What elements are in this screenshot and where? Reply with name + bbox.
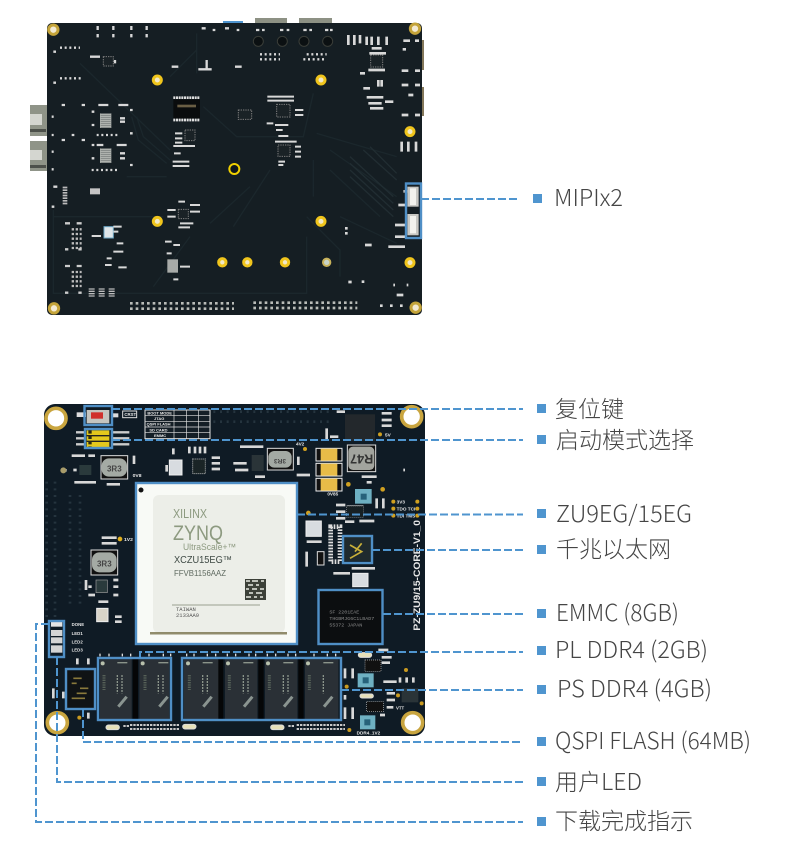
VGA-style pad grids [65,187,112,297]
highlight box: PS DDR4 [182,658,341,720]
bottom capacitors [106,653,373,730]
user LEDs: LED1 [72,631,83,636]
test point labels: 5V [385,433,392,438]
test point labels [296,432,419,518]
panel: top board photo [30,18,424,315]
right side connectors [421,40,424,116]
callout: ZU9EG/15EG: ZU9EG/15EG [556,495,692,529]
user LEDs [51,621,84,653]
misc parts lower right: DDR4_1V2 [357,731,381,736]
boot mode table: BOOT MODE [147,410,172,415]
QSPI flash chip [67,671,94,708]
callout: 复位键 [84,390,624,425]
callout: 下载完成指示: 下载完成指示 [555,802,693,836]
highlight box: PL DDR4 [98,658,171,720]
callout: ZU9EG/15EG [136,483,692,644]
inductor 3R3: 3R3 [107,465,122,474]
callout: 启动模式选择 [85,421,694,455]
dotted pad rows [60,48,327,170]
callout: PL DDR4 (2GB) [98,631,708,720]
main FPGA chip: TAIWAN [176,606,196,613]
test point labels: TDO TCK [397,506,418,511]
inductor 3R3 lower [91,550,118,575]
boot mode table: EMMC [154,433,166,438]
highlight box: boot DIP switch [85,429,112,448]
inductor small [267,448,293,470]
main FPGA chip: UltraScale+™ [183,542,236,552]
highlight box: Ethernet PHY [343,536,372,563]
transformer IC [173,98,200,120]
reset switch: CRST [124,412,136,417]
ball labels above DDR4 [99,651,336,659]
callout: MIPIx2 [406,179,623,238]
inductor small: 3R3 [274,457,286,464]
misc parts lower right: VTT [396,705,405,710]
callout: PS DDR4 (4GB) [182,658,712,720]
dark round pads near the top edge [253,36,333,46]
user LEDs: LED2 [72,639,83,644]
reset switch [77,410,137,423]
misc parts around Ethernet [233,412,405,587]
callout: PS DDR4 (4GB): PS DDR4 (4GB) [557,670,712,704]
left side USB connectors [30,105,48,171]
callout: 千兆以太网: 千兆以太网 [556,530,671,564]
board body [47,23,422,315]
mounting holes bottom [47,713,67,733]
EMMC chip: 55372 JAPAN [329,623,362,629]
inductor R47 [347,445,376,472]
callout: 千兆以太网 [343,530,671,564]
tantalum capacitors [316,448,342,491]
callout: MIPIx2: MIPIx2 [554,179,623,213]
DDR4 marks [101,661,310,665]
callout: 下载完成指示 [36,624,693,836]
power circuitry left: 0V8 [133,473,142,479]
inductor R47: R47 [350,451,373,465]
board body [44,404,425,736]
misc parts lower right [53,650,424,736]
boot mode table [145,410,210,439]
callout: PL DDR4 (2GB): PL DDR4 (2GB) [555,631,708,665]
callout: QSPI FLASH (64MB) [66,669,751,756]
user LEDs: LED3 [72,648,83,653]
small ICs [103,55,383,219]
test point labels: 4V2 [296,442,305,447]
main FPGA chip: ZYNQ [173,522,223,545]
main FPGA chip: 2133AA9 [176,612,199,619]
data matrix code [245,579,266,600]
copper traces [53,33,397,293]
highlight box: EMMC [318,590,382,644]
boot mode DIP switch [76,430,129,447]
highlight box: FPGA [136,483,297,644]
callout: QSPI FLASH (64MB): QSPI FLASH (64MB) [555,722,751,756]
boot mode table: JTAG [154,416,164,421]
DDR4 chips [100,659,338,719]
mounting hole top right [402,407,422,427]
callout: 用户LED: 用户LED [555,763,642,797]
bottom pin headers [123,725,345,729]
Ethernet chip [344,537,371,561]
highlight box: QSPI flash [66,669,95,709]
main FPGA chip: XILINX [173,507,208,521]
power circuitry left [60,447,220,622]
teal inductors [358,673,375,729]
EMMC chip: THGBMJG6C1LBAD7 [329,616,374,622]
inductor 3R3 [101,456,128,479]
black gaps between DDR4 chips [135,658,301,720]
callout: EMMC (8GB): EMMC (8GB) [556,594,679,628]
board name silkscreen: PZ-ZU9/15-CORE-V1_0 [412,520,422,631]
main FPGA chip: FFVB1156AAZ [174,569,226,578]
gold mounting pads [153,76,414,267]
EMMC chip: SF 2201EAE [329,609,359,615]
highlight box: MIPI connectors [406,184,421,238]
faint via field [47,412,330,622]
callout: EMMC (8GB) [318,590,679,644]
power IC [345,414,375,441]
MIPI connectors [403,187,419,235]
network magnetics [90,113,178,273]
callout: 复位键: 复位键 [555,390,624,424]
callout: 启动模式选择: 启动模式选择 [556,421,694,455]
user LEDs: DONE [72,622,84,627]
callout: 用户LED [49,621,642,797]
main FPGA chip: XCZU15EG™ [174,555,232,566]
test point labels: TDI TMS [397,513,415,518]
highlight box: reset switch [84,406,112,425]
boot mode table: QSPI FLASH [147,422,171,427]
white component pads [52,26,333,207]
crystal [104,227,113,238]
test point labels: 3V3 [397,499,405,504]
inductor 3R3 lower: 3R3 [97,560,112,569]
boot mode table: SD CARD [149,427,168,432]
panel: bottom core board photo [44,404,425,736]
board corner mounting holes [49,24,420,313]
test point labels: 0V85 [327,492,339,497]
highlight box: user LEDs [49,621,64,657]
top edge connectors [223,18,332,24]
bottom edge pin headers [130,303,357,309]
EMMC chip [320,591,382,643]
mounting hole top left [46,408,66,428]
power circuitry left: 1V2 [124,537,133,543]
main FPGA chip [136,483,297,644]
teal inductor [355,489,372,504]
